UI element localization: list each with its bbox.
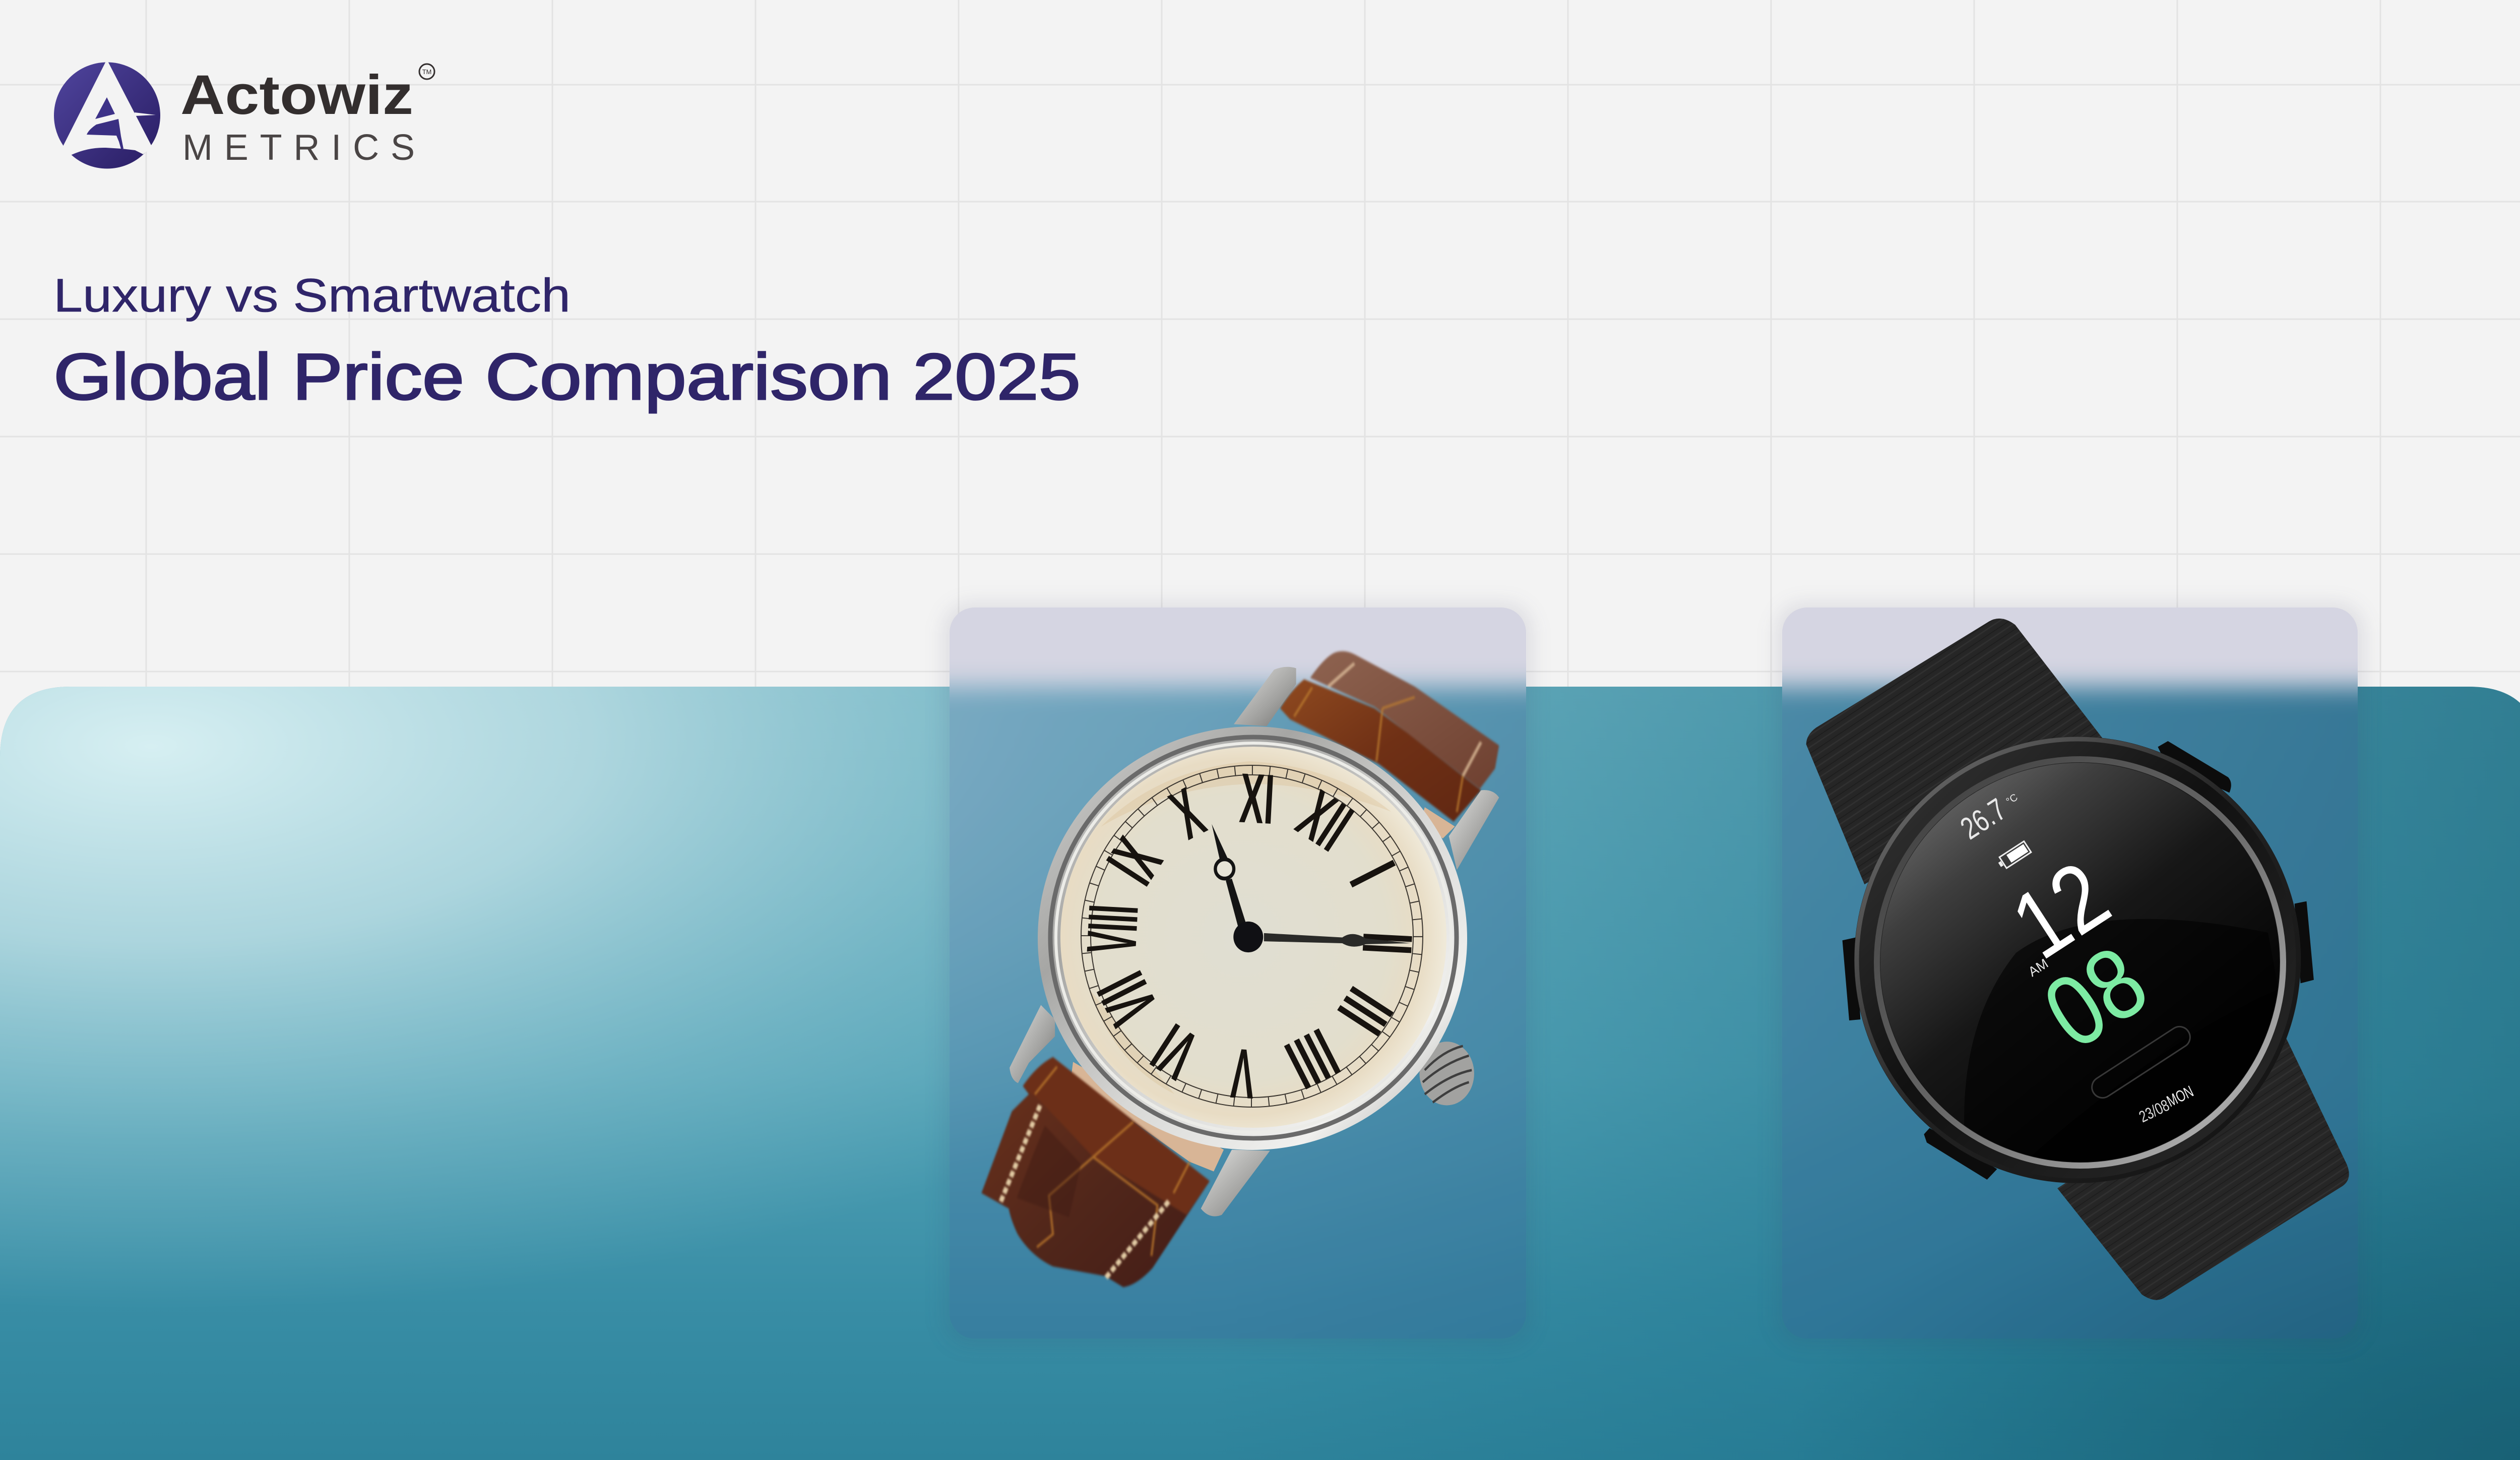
teal gradient band (0, 687, 2520, 1460)
crown (1419, 1042, 1474, 1106)
screen lower black (2016, 983, 2293, 1170)
dial numerals: XII (1285, 775, 1365, 866)
dial numerals: VIII (1072, 903, 1153, 955)
dial numerals (1072, 758, 1428, 1114)
date label: 23/08 (2136, 1096, 2172, 1126)
lugs (1010, 667, 1499, 1216)
trademark badge (419, 64, 434, 79)
panel shadows (942, 602, 2365, 1347)
upper strap (1280, 651, 1499, 822)
logo subtitle: METRICS (182, 128, 415, 168)
day label: MON (2164, 1082, 2196, 1110)
blurred backdrop for glass panels (950, 607, 2358, 1326)
trademark badge: TM (422, 68, 431, 76)
logo (54, 59, 434, 168)
time: minutes: 08 (2025, 925, 2166, 1070)
temperature unit: °C (2004, 792, 2020, 807)
watch dial (1060, 747, 1446, 1128)
AM label: AM (2026, 956, 2051, 980)
dial numerals: IX (1092, 825, 1177, 897)
dial patina (1089, 761, 1391, 1094)
minute track (1081, 765, 1423, 1107)
battery icon (1996, 841, 2031, 870)
smartwatch illustration (1806, 619, 2349, 1300)
time: hours: 12 (1994, 841, 2127, 979)
watch hands (1212, 824, 1411, 952)
strap and side buttons (1806, 619, 2349, 1300)
dial numerals: VII (1082, 961, 1172, 1037)
heading: subtitle: Luxury vs Smartwatch (53, 269, 571, 322)
luxury watch illustration (981, 651, 1499, 1287)
dial numerals: V (1229, 1034, 1256, 1114)
dial numerals: XI (1238, 758, 1276, 839)
panel: smartwatch (1782, 607, 2358, 1339)
screen glare (1965, 919, 2230, 1134)
watch straps and lugs (981, 651, 1499, 1287)
beige strap underside (1071, 807, 1455, 1172)
dial numerals: II (1348, 930, 1428, 956)
icon: Actowiz logo mark (54, 59, 160, 168)
dial numerals: I (1335, 850, 1411, 897)
watch case (1038, 726, 1467, 1150)
watch screen (1880, 763, 2280, 1162)
lower strap (981, 1057, 1210, 1287)
dial numerals: X (1159, 773, 1216, 854)
activity pill (2088, 1022, 2194, 1102)
logo wordmark: Actowiz (180, 64, 413, 126)
dial numerals: III (1323, 976, 1408, 1047)
heading: title: Global Price Comparison 2025 (53, 340, 1081, 413)
dial numerals: VI (1139, 1009, 1211, 1094)
panel: luxury watch (950, 607, 1526, 1339)
dial numerals: IIII (1275, 1014, 1350, 1105)
temperature reading: 26.7 (1955, 792, 2012, 846)
watch case (1854, 737, 2301, 1183)
